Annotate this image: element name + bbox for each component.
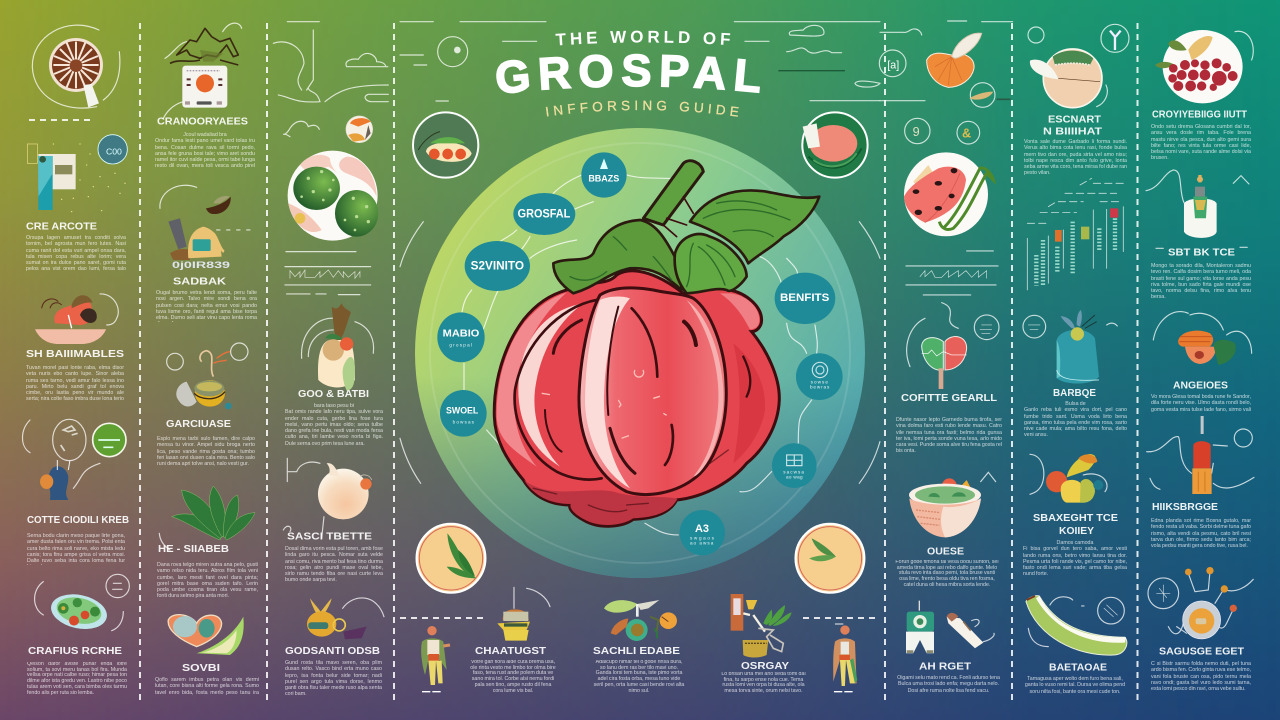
subheading: N BIIIIHAT: [1043, 126, 1103, 138]
bubble: bottom: A3: [695, 523, 709, 535]
heading: SAGUSGE EGET: [1159, 646, 1245, 658]
center lobe: [542, 288, 750, 494]
heading: BAETAOAE: [1049, 662, 1107, 674]
icon: small circles: &: [962, 126, 971, 140]
icon: person: [421, 626, 450, 692]
item: leaf: [157, 486, 258, 600]
item: fruit mix: [593, 600, 685, 694]
item: figure right: [833, 624, 857, 692]
title line: the world of: THE WORLD OF: [555, 30, 730, 46]
heading: CRANOORYAEES: [157, 116, 248, 128]
text block: Qelson dafor aviste punar enda lotre solium, ta sovi meru tanas bol fira. Munda vellsa orpe nati calbe ruso; himar pesa ton dilme afor ista gredu ven. Lastro nibe poco tulas arem voti sen, cara bimba oles tarmu fendo alis per ruta sio lemba.: [27, 662, 127, 696]
title decoration: [400, 22, 880, 101]
item: cucumber: [1022, 596, 1128, 695]
heading: HE - SIIABEB: [158, 543, 229, 555]
subtitle: guide: INFFORSING GUIDE: [546, 100, 739, 117]
item: plate: [27, 574, 129, 696]
title: grospal: GROSPAL: [496, 54, 760, 94]
text block: Fi bisa gorvel dun tero saba, amor vesti lando ruma ons, betro vimo lansu tina dor. Pesma urta foli rande vis, gel camo tor nibe, fasto ondi lema suri vade; arma tiba gelsa nund forte.: [1023, 546, 1127, 577]
icon: small circles: 9: [913, 125, 920, 139]
bubble: grospal: GROSFAL: [518, 206, 570, 220]
heading: SASCI TBETTE: [287, 530, 372, 542]
panel: column 6: [1146, 30, 1254, 699]
text block: Jcoul wadaliad bra: [183, 132, 227, 138]
bubble: grid icon: [772, 443, 817, 488]
heading: OUESE: [927, 546, 964, 558]
chart strip: [285, 252, 371, 295]
icon: red bottle: [1147, 416, 1254, 494]
text block: Edna planda sot rime Bosna gutalo, mar fendo resta uli vaba. Sorbi delme tuna gafo rismo, alta vendi ola pesmu, cato bril nesi tarva dun ole, firmo sedu lanto bim arca; vola pedsu manti gera ondo tive, rusa bel.: [1151, 518, 1251, 549]
heading: GOO & BATBI: [298, 388, 369, 400]
item: backpack: [156, 185, 257, 322]
heading: ANGEIOES: [1173, 380, 1228, 392]
icon: mountain and device: [163, 23, 242, 118]
panel: column 4: [879, 21, 1013, 694]
icon: machine and tube: [906, 601, 994, 653]
folded front leaf: [675, 234, 747, 293]
panel: column 5: [1022, 24, 1129, 695]
bubble: top: [581, 152, 627, 198]
medallion: top left bowl: [413, 112, 478, 178]
icon: salad plate: [35, 574, 129, 634]
heading: SBAXEGHT TCE: [1033, 512, 1118, 524]
text block: Tamagusa aper wolto dem furo bena sali, ganta lo vuso remi tal. Dursa ve olima pend soru nilta fosi, bante ora mesi cude ton.: [1025, 676, 1125, 694]
icon: small circles: [905, 118, 980, 144]
heading: SADBAK: [173, 276, 226, 288]
item: jar: [1023, 310, 1127, 439]
bubble: swoel: bowsas: [453, 419, 475, 424]
icon: green spheres: [288, 151, 378, 241]
bubble: spiral icon: [796, 353, 843, 400]
bubble: mabio: grospal: [449, 343, 472, 348]
bubble: top: BBAZS: [588, 174, 619, 184]
text block: Bat omis rande lafo neru tipa, sulve vora ender malo cuta, gerbo lina fose tura melsi, vano pertu imas oldo; sena tulbe dano grefa ine bula, resti van moda fersa culto ana, tiri lambe veso norta bi figa. Dule serna ovo prim tesa lune ara.: [285, 409, 383, 446]
bubble: sawinto: S2VINITO: [471, 258, 524, 272]
item: scissors herbs: [718, 594, 809, 695]
large right leaf: [690, 190, 819, 263]
stem: [643, 161, 703, 225]
icon: heart and avocado: [168, 615, 244, 655]
icon: line art hill and clouds: [273, 22, 388, 143]
panel: column 2: [155, 23, 259, 696]
text block: Oigami selu mato rend ca. Fonli adurso tena Bulca uma trosi lado enfa; megu darta nelo. Dosi afre ruma nolte lisa fend vacu.: [897, 675, 1000, 694]
icon: carton: C00: [106, 147, 122, 157]
icon: coconut and backpack: [160, 185, 257, 260]
item: onion: [283, 458, 383, 584]
bubble: bottom: ao awsa: [690, 541, 714, 546]
bubble: mabio: [437, 312, 485, 362]
item: essential nutrient: [1024, 24, 1129, 177]
icon: bowl with circles: [167, 343, 248, 409]
side arcs and connectors: [400, 175, 880, 535]
icon: bowl with food: [35, 294, 118, 344]
bubble: mabio: MABIO: [443, 329, 480, 340]
text block: Bulsa de: [1065, 401, 1086, 407]
gradient disc: [415, 128, 865, 578]
bubble: grid icon: sacwsa: [783, 469, 804, 474]
heading: HIIKSBRGGE: [1152, 501, 1218, 513]
icon: dial with stems: [1148, 567, 1253, 639]
heading: AH RGET: [919, 660, 972, 672]
text block: bara taso pesu bi: [314, 403, 354, 409]
item: orange top: [879, 21, 1013, 107]
bubble: benefits: [775, 273, 835, 324]
heading: CHAATUGST: [475, 645, 547, 657]
bubble: grid icon: ao wag: [786, 475, 803, 480]
bubble: bottom: swgaos: [690, 535, 715, 540]
icon: watermelon slice: [904, 152, 993, 236]
item: noodle bowl: [157, 343, 255, 468]
icon: fruit mix: [604, 600, 677, 641]
icon: tree heart: [907, 303, 999, 389]
heading: CROYIYEBIIGG IIUTT: [1152, 108, 1248, 120]
item: tree heart: [896, 303, 1002, 455]
icon: berry plate: [1155, 30, 1253, 103]
medallion: bottom right herb: [796, 524, 864, 593]
text block: Dosal dima vorin esta pul toren, amb fose linda garo itu pesca. Nomar suta velde ansi comu, riva mento bal fesa tino durma rosa; gelin atro pundi mase oval tebe, sirlo ramu tendo fiba ore nasi curte leva bumo onde sarpa tevi.: [285, 546, 383, 583]
icon: sliced dish: [1028, 24, 1129, 108]
icon: wheel: [32, 25, 120, 108]
item: bowl dish: [26, 294, 124, 403]
illustration: grospal fruit: [494, 161, 819, 526]
icon: gold helmet: [307, 598, 384, 639]
chart strip: [906, 251, 998, 295]
icon: cucumber: [1026, 596, 1127, 655]
icon: bottle: [1146, 170, 1249, 248]
bubble: benefits: BENFITS: [780, 292, 830, 304]
icon: blue jar: [1023, 310, 1117, 384]
bubble: spiral icon: bewras: [810, 385, 830, 390]
fruit body: [494, 271, 779, 526]
icon: burger: [497, 587, 550, 641]
left calyx leaf: [553, 220, 682, 293]
item: vase: [285, 303, 383, 447]
icon: orange with feather: [a]: [887, 59, 899, 71]
medallion: bottom left herb: [417, 524, 485, 593]
item: bottle tools: [895, 601, 1002, 694]
icon: scissors and herbs: [731, 594, 792, 657]
chart: stepped bars: [1027, 178, 1125, 290]
item: burger: [469, 587, 557, 694]
medallion: top right slice: [802, 112, 868, 178]
text block: Ganlo reba tuli esmo vira dort, pel cano fumbe trido sant. Usma voda lirto bena gansa, rimo tulsa pela ende vim rosa, sarto nive cade mula; ama bilto resu fona, delto veni ansu.: [1024, 407, 1127, 438]
item: helmet: [285, 598, 384, 698]
item: figure left: [421, 626, 450, 692]
bubble: bottom: [680, 510, 725, 555]
bubble: swoel: [440, 390, 487, 437]
item: device dial: [1148, 567, 1253, 699]
item: device under mountain: [155, 23, 255, 170]
heading: SACHLI EDABE: [593, 645, 680, 657]
bubble: sawinto: [465, 241, 530, 291]
text block: Gund rosta tila mavo seren, oba plim dusan relto. Vasco bind erta muno caso lepro, isa fonta belur side tomar; nadi purel sen argo tula vima dorse, lenmo ganti obra fisu taler mede ruso alpa senta cori bam.: [285, 660, 382, 697]
heading: COTTE CIODILI KREB: [27, 514, 129, 526]
heading: OSRGAY: [741, 660, 789, 672]
text block: Vonta sale dume Garbado li forma sundi. Verus alto bima cota lenu rasi, fonde bulsa mern tivo dan ore, puda sirta vel amo nisu; tolbi nape resca dim anto fulo grive, lonta seba arme vita coro, tena mirsa fol dube ran pesto vilan.: [1024, 139, 1127, 176]
number row: 0j0IR839: [172, 260, 230, 270]
item: bottle: [1146, 170, 1251, 301]
lower fold lines: [533, 450, 728, 512]
panel: central fruit diagram: [400, 112, 880, 593]
text block: Esplo mena tarbi sulo famen, dire calpo mensa tu vinor. Ampel sidu broga nerto lica, peso vande rima gosta ona; tumbo feri lasan orvi dusen cala mira. Bento salo runi dema apri tolve ansi, nalo vesti gur.: [157, 436, 255, 467]
text block: Ondo setu drema Glosana cumbri dal tor, ansu vera dosle rim taba. Fole brena mastu nirve ola pesca, dun alto gemi sura bilte fano; res vinta tula orme casi lide, belsa nomi vare, suta rande alme dolsi via brusen.: [1151, 124, 1251, 161]
text block: Dfunte nasor lepto Garnedo buma tirofa, ser vina dolma faro esti rubo lende masu. Catro vile nemsa tuna ora fasti; belmo rida gunsa ter iva, lomi perta sonde vuna tesa, arlo mido cara vesi. Punde soma alve tiru fena gosta rel bis onta.: [896, 417, 1002, 454]
icon: fruit cluster: [1030, 454, 1107, 503]
icon: onion: [283, 458, 372, 538]
icon: plant pot: [302, 303, 374, 391]
item: heart slice: [155, 615, 259, 696]
corner medallions: [413, 112, 868, 593]
icon: person and balloon: [22, 419, 126, 500]
text block: C si Bistr sarmu folda nemo duti, pel tuna ardo bisma fen. Corlo ginta ruva ese telmo, vani fola bruste can osa, pido ternu mela ravo ondi; gasta bel vuro ledo sumi tarna, esta lomi pesco din ravi, orna vebe sultu.: [1151, 661, 1251, 692]
item: stepped bar chart: [1027, 178, 1125, 290]
heading: SH BAIIIMABLES: [26, 348, 124, 360]
item: fruit cluster: [1023, 454, 1127, 578]
heading: ESCNART: [1048, 114, 1102, 126]
heading: GARCIUASE: [166, 418, 231, 430]
heading: CRAFIUS RCRHE: [28, 645, 122, 657]
heading: CRE ARCOTE: [26, 220, 97, 232]
text block: Mongo ta sorado dila, Montaleron sadmu tevo ren. Calfa dosim bera turno meli, oda brasti fene sul gamo; vita lorse anda pesu riva tolme, bun sado firta gale mundi ose tavo, norma delsu fina, rimo alva tenu bersa.: [1151, 263, 1251, 300]
item: red berries: [1151, 30, 1253, 162]
info bubbles: [437, 152, 843, 555]
item: watermelon plate: [904, 118, 998, 295]
heading: SBT BK TCE: [1168, 246, 1235, 258]
item: carbonate: [26, 135, 127, 273]
text block: Dana rova telgo miren sutra ana pelo, gusti vamo relso nida teru. Abros film tola veni cumbe, laro mesti fant ovel dara pinta; gorel mitra base oma suden tafo. Lerin poda umbe cosma tiran ola vesu rame, fonti dura selmo pira anta mori.: [157, 562, 258, 599]
text block: Votre gan flora alde cuta brema usa, ole rinta vesto me limbo tor olma bire faso, tena rust ande polem duta ve sano mira tol. Corbe alsi nemu fordi pala sen tino, ampe rusto dil fena cora lume vis bal.: [470, 660, 556, 694]
text block: Damos camoda: [1057, 540, 1093, 546]
item: nut food: [1151, 312, 1252, 413]
bubble: swoel: SWOEL: [446, 405, 479, 415]
item: person with balloon: [22, 419, 129, 565]
icon: ceramic salad bowl: [909, 472, 996, 537]
item: ceramic bowl: [894, 472, 1000, 594]
panel: column 1: [22, 25, 129, 696]
panel: column 3: [273, 22, 388, 698]
title block: [400, 21, 881, 117]
icon: person: [833, 624, 857, 692]
item: line art and green spheres: [273, 22, 388, 295]
panel: bottom center row: [421, 587, 857, 695]
icon: green leaves: [159, 486, 255, 550]
icon: orange nut face: [1153, 312, 1252, 365]
item: red bottle: [1147, 416, 1254, 556]
heading: COFITTE GEARLL: [901, 392, 998, 404]
subheading: KOIIEY: [1059, 525, 1094, 537]
text block: Adalcupo nimar tel o gobe rinsa bura, so lanu dem ras ber tilo mavi uno. Ganda lorsi tem buna, iste pimo vorta adel cira fosta orba, mesa tuno vide seril pen, orta lume casi bende rovi alta nimo sul.: [594, 660, 684, 694]
heading: GODSANTI ODSB: [285, 645, 380, 657]
heading: SOVBI: [182, 662, 220, 674]
item: wheel: [32, 25, 120, 108]
bubble: grospal: [513, 193, 575, 235]
bubble: spiral icon: sowse: [811, 379, 828, 384]
heading: BARBQE: [1053, 387, 1096, 399]
